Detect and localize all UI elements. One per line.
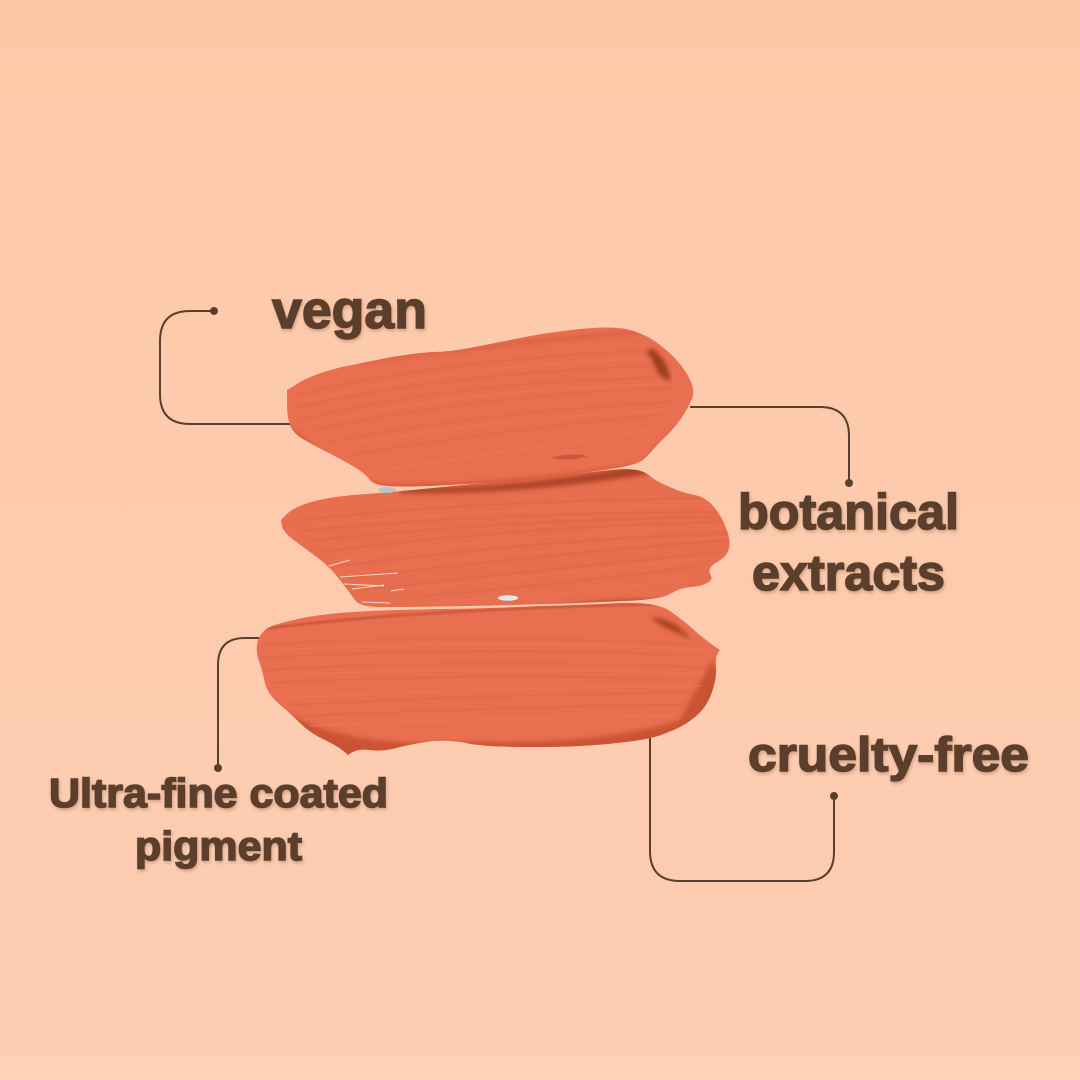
label: ultra-fine coated: Ultra-fine coated bbox=[49, 770, 388, 816]
swatch: bottom smear bbox=[256, 602, 720, 755]
connector: botanical extracts bbox=[690, 407, 853, 487]
label: pigment: pigment bbox=[135, 823, 302, 869]
swatch: middle smear bbox=[281, 462, 730, 612]
connector: cruelty-free bbox=[650, 738, 838, 881]
label: vegan: vegan bbox=[272, 281, 427, 340]
label: extracts: extracts bbox=[752, 545, 945, 601]
connector: ultra-fine coated pigment bbox=[214, 638, 262, 772]
connector: vegan bbox=[160, 307, 290, 424]
label: cruelty-free: cruelty-free bbox=[748, 729, 1029, 782]
label: botanical: botanical bbox=[738, 484, 959, 540]
paint gaps: white streaks bbox=[329, 560, 404, 603]
swatch: top smear bbox=[287, 328, 694, 486]
